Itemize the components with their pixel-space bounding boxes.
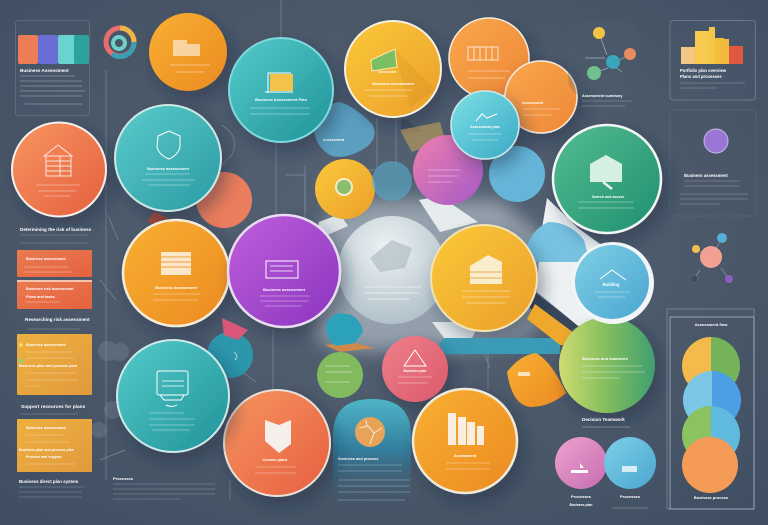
circle: pink purple [413, 135, 483, 205]
heading: Assessment plan [470, 125, 500, 129]
circle: pink lower [555, 437, 607, 507]
circle: green right: Search and assess [592, 195, 624, 199]
arrow: orange diagonal [527, 304, 592, 348]
panel: bar chart top right: Plans and processes [680, 74, 722, 79]
text: bottom centre note [113, 476, 215, 499]
chart heading: Portfolio plan overview [680, 68, 727, 73]
panel: coral box one [17, 250, 92, 277]
icon: building [470, 255, 502, 284]
circle: orange top [149, 13, 227, 91]
icon: monitor [157, 371, 188, 406]
blob: pale blue behind green [525, 222, 590, 262]
network heading: Assessment summary [582, 94, 623, 98]
circle: blue lower: Processes [620, 494, 641, 499]
icon: teal gem [326, 313, 363, 346]
text: mid left heading [20, 227, 92, 243]
circle: light teal [451, 91, 519, 159]
panel: bar chart top right [670, 20, 756, 100]
circle: coral left [12, 122, 106, 216]
blob: teal small [207, 332, 253, 378]
panel: amber box one: Business plan and process plan [19, 364, 78, 368]
circle: teal lower [117, 340, 229, 452]
heading: Business assessment [372, 81, 415, 86]
circle: yellow lower: Assessment [454, 454, 477, 458]
circle: green right [553, 125, 661, 233]
panel: amber box two: Process and support [26, 455, 63, 459]
circle: rose [382, 336, 448, 402]
icon: document [161, 252, 191, 275]
circle: pink lower: Business plan [570, 503, 592, 507]
panel: coral box two: Plans and tasks [26, 295, 55, 299]
stack circle: green blue [682, 406, 740, 464]
panel: purple icon card [670, 110, 756, 216]
arrow: orange wedge [325, 342, 375, 352]
icon: roof [600, 270, 626, 280]
heading: Building [603, 282, 620, 287]
heading: support two: Support resources for plans [21, 404, 86, 410]
globe circle [338, 216, 446, 324]
heading: Business and teamwork [582, 356, 629, 361]
circle: yellow top [345, 21, 441, 117]
heading: bottom centre-right: Decision Teamwork [582, 417, 625, 422]
panel: stacked circles [667, 309, 754, 509]
circle: lime green [559, 317, 655, 413]
heading: support two [21, 404, 86, 414]
icon: monitor [266, 261, 298, 278]
icon: house [44, 145, 72, 176]
text lines [36, 185, 80, 196]
dome heading: Business and process [338, 457, 378, 461]
icon: monitor [265, 73, 293, 93]
icon: shield [157, 131, 180, 159]
white band shapes [316, 196, 625, 338]
panel: coral box one: Business assessment [26, 257, 66, 261]
heading: Business assessment [263, 287, 306, 292]
icon: network lower right [690, 233, 733, 283]
node green [587, 66, 601, 80]
heading: Business assessment [155, 285, 198, 290]
circle: orange middle [123, 220, 229, 326]
panel: amber box one [17, 334, 92, 395]
icon: colour ring [106, 28, 134, 57]
circle: small green [317, 352, 363, 398]
panel: network top right [568, 20, 640, 106]
panel: top left legend [16, 20, 90, 116]
circle: pink lower: Processes [571, 494, 592, 499]
dark wedge under white band [528, 292, 578, 336]
blob text: Assessment [323, 138, 345, 142]
stack heading: Assessment flow [695, 322, 728, 327]
circle: orange small lower [507, 353, 566, 407]
panel: amber box two: Business assessment [26, 426, 66, 430]
circle: blue top of green [572, 242, 654, 324]
circle: yellow middle [431, 225, 537, 331]
node yellow [593, 27, 605, 39]
circle: yellow lower [413, 389, 517, 493]
panel: amber box two [17, 419, 92, 472]
heading: Business Assessment Plan [255, 97, 307, 102]
text: bottom left note: Business direct plan system [19, 479, 78, 484]
circle: rose: Business plan [404, 369, 426, 373]
text: bottom left note [19, 479, 84, 497]
legend heading: Business Assessment [20, 68, 69, 73]
icon: green dot [336, 179, 352, 195]
wedge: dark red [147, 212, 168, 226]
icon: bar chart [448, 413, 484, 445]
heading: support one: Researching risk assessment [25, 317, 90, 322]
heading: Business assessment [147, 166, 190, 171]
icon: green board [371, 49, 397, 72]
connector lines [100, 0, 490, 500]
blob: blue right [489, 146, 545, 202]
icon: roof line [476, 114, 497, 121]
heading: bottom centre-right [582, 417, 630, 427]
circle: orange small [505, 61, 577, 133]
icon: purple orb [704, 129, 728, 153]
circle: yellow small [315, 159, 375, 219]
circle: purple [228, 215, 340, 327]
stack circle: orange [682, 437, 738, 493]
panel: amber box one: Business assessment [26, 343, 66, 347]
card heading: Business assessment [684, 173, 728, 178]
heading: support one [25, 317, 90, 329]
blob: pale blue [372, 161, 412, 201]
circle: coral lower [224, 390, 330, 496]
colour swatches [18, 35, 89, 64]
icon: globe [355, 417, 385, 447]
blob: sky blue [314, 102, 375, 157]
grey faint blobs left [91, 341, 129, 438]
icon: calendar grid [468, 47, 498, 60]
circle: teal top [229, 38, 333, 142]
circle: orange top right [449, 18, 529, 98]
node teal [606, 55, 620, 69]
dark patch top centre [400, 118, 425, 132]
icon: cap [622, 466, 637, 472]
stack circle: blues [683, 371, 741, 429]
heading: Assessment [522, 101, 544, 105]
panel: amber box two: Business plan and process plan [19, 448, 74, 452]
icon: ship [571, 463, 588, 473]
icon: building [173, 40, 200, 56]
blob: yellow wedge [400, 122, 445, 152]
bar: teal ribbon [440, 338, 560, 354]
panel: teal dome [333, 399, 411, 510]
stack circle: yellow green [682, 337, 740, 395]
icon: green card [590, 155, 622, 189]
text: bottom centre note: Processes [113, 476, 134, 481]
node coral [624, 48, 636, 60]
central grey glow [315, 200, 560, 352]
icon: shield [265, 420, 291, 453]
circle: teal left [115, 105, 221, 211]
circle: blue lower [604, 437, 656, 508]
panel: coral box two [17, 280, 92, 309]
text: mid left heading: Determining the risk of business [20, 227, 92, 232]
panel: coral box two: Business risk assessment [26, 287, 74, 291]
legend text lines [20, 76, 85, 104]
circle: coral lower: Custom plans [262, 458, 288, 462]
icon: triangle [404, 350, 426, 366]
wedge: pink behind purple [222, 318, 248, 340]
bar chart [681, 27, 743, 64]
icon: small stack [518, 372, 530, 376]
stack caption: Business process [694, 495, 729, 500]
blob: coral [196, 172, 252, 228]
